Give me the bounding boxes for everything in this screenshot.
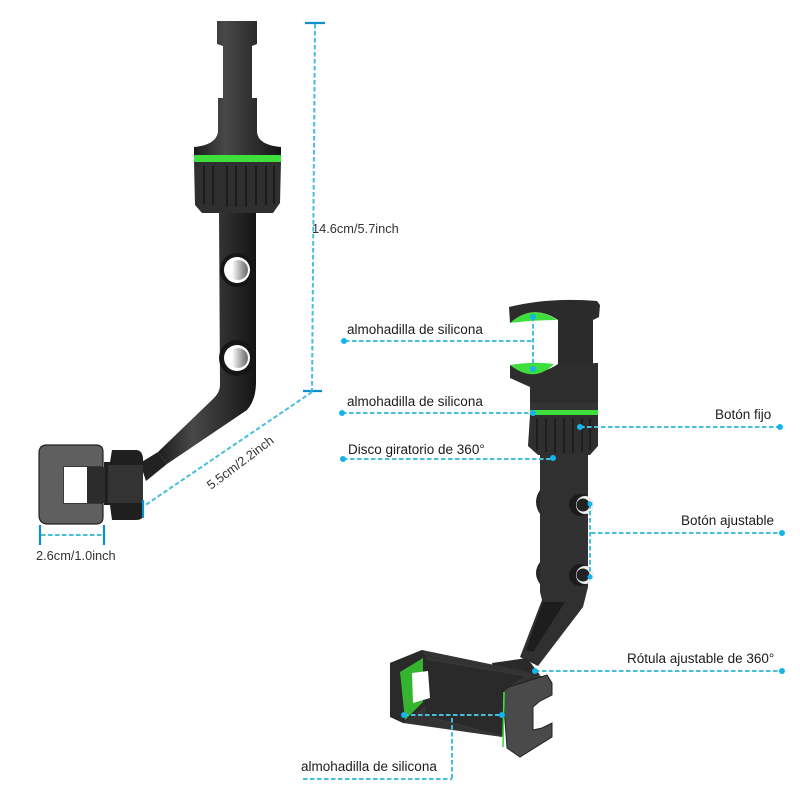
arm shading [526, 602, 565, 652]
dimension: arm length [143, 392, 312, 518]
top green pad [510, 312, 557, 323]
phone holder body [390, 650, 547, 737]
lower clamp body [510, 363, 598, 404]
front green edge [503, 692, 504, 747]
callout: collar silicone [339, 410, 536, 416]
green ring [194, 155, 281, 162]
collar green [530, 410, 598, 415]
left plate [390, 650, 426, 723]
callout: ball joint [532, 668, 785, 674]
label: arm length: 5.5cm/2.2inch [204, 432, 276, 492]
dimension: height [303, 23, 325, 391]
left product: side view of mount [39, 21, 281, 524]
lower green pad [510, 363, 554, 374]
holder cradle ribs [425, 659, 527, 736]
label: height: 14.6cm/5.7inch [312, 221, 399, 236]
right product: assembled mount [390, 300, 600, 757]
upper button [569, 494, 594, 516]
callout text: ball joint: Rótula ajustable de 360° [627, 651, 774, 666]
ball mount [104, 450, 143, 520]
arm [158, 213, 256, 464]
grip [528, 415, 598, 455]
callout text: silicone pad 1: almohadilla de silicona [347, 322, 483, 337]
opening [64, 467, 87, 503]
callout: rotating disc [340, 455, 556, 462]
top cap and shaft [194, 21, 281, 155]
left green pad [400, 658, 423, 720]
callout: top silicone pad [341, 314, 536, 372]
neck [140, 452, 167, 481]
callout text: holder silicone: almohadilla de silicona [301, 759, 437, 774]
ball joint [492, 658, 540, 675]
callout: holder silicone [303, 712, 505, 779]
left hinge knuckles [536, 490, 540, 584]
label: clip width: 2.6cm/1.0inch [36, 548, 116, 563]
callout text: silicone pad 2: almohadilla de silicona [347, 394, 483, 409]
left opening [412, 671, 430, 703]
dimension: clip width [40, 525, 104, 545]
upper joint hole [220, 253, 254, 287]
lower arm [520, 455, 588, 666]
callout: fixed button [577, 424, 783, 430]
front plate [503, 675, 552, 757]
lower joint hole [219, 340, 255, 376]
ribbed grip [194, 162, 281, 213]
callout text: adjustable button: Botón ajustable [681, 513, 774, 528]
collar ring [530, 403, 598, 411]
top clamp [509, 300, 600, 365]
clip plate [39, 445, 103, 524]
callout text: rotating disc: Disco giratorio de 360° [348, 442, 485, 457]
callout text: fixed button: Botón fijo [715, 407, 771, 422]
lower button [569, 564, 594, 586]
callout: adjustable button [588, 502, 785, 580]
